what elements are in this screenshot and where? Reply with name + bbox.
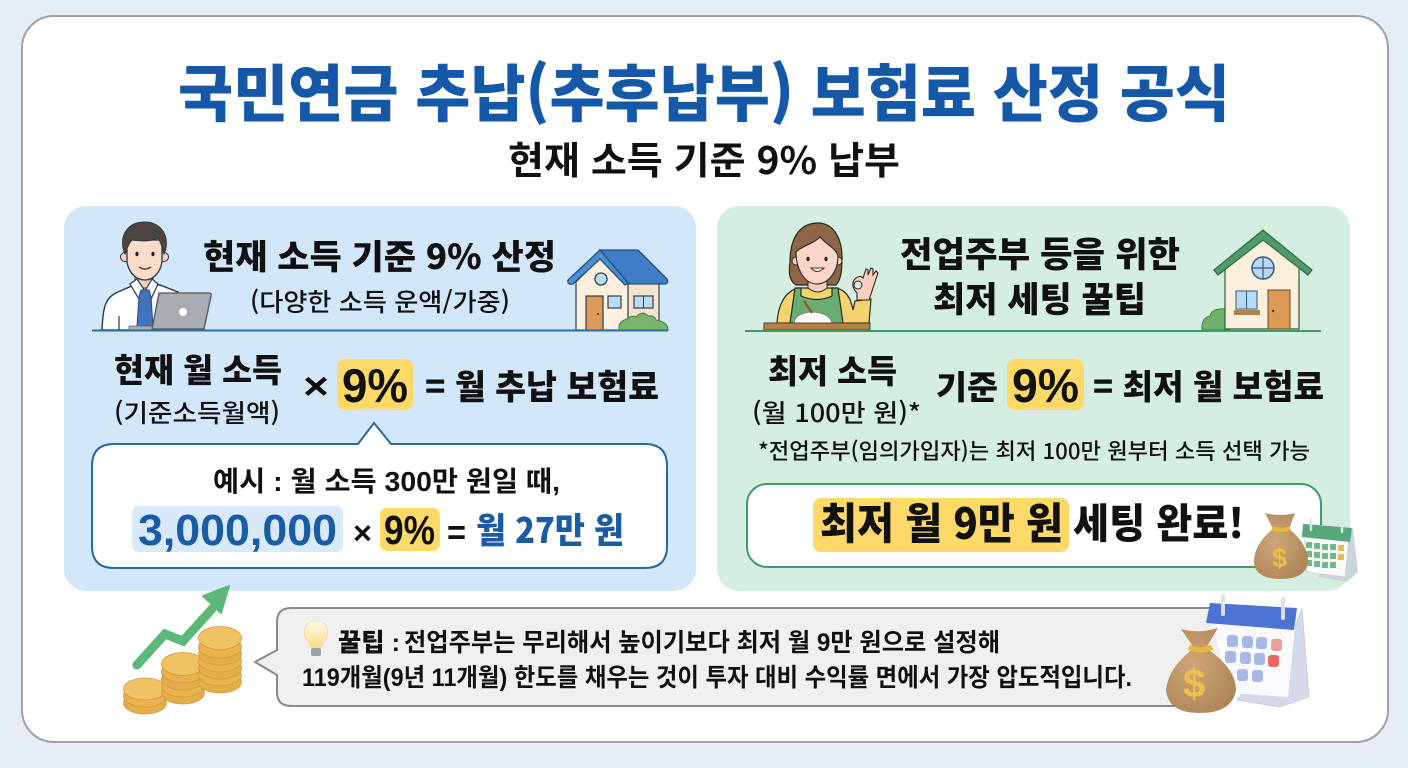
formula: lowest income [752,345,921,430]
formula: basis label: 기준 [936,361,998,409]
icon: money bag small: $ [1272,543,1287,573]
icon: money bag small [1254,513,1308,579]
tip line 2: 119개월(9년 11개월) 한도를 채우는 것이 투자 대비 수익률 면에서 가장 압도적입니다. [302,664,1132,692]
example rate: 9% [384,507,435,553]
subtitle: 현재 소득 기준 9% 납부 [508,130,900,185]
icon: light bulb [304,621,328,656]
coin stack tall [198,626,242,693]
divider line [92,330,668,332]
heading: homemaker: 최저 세팅 꿀팁 [933,272,1146,323]
example text: 예시 : 월 소득 300만 원일 때, [213,466,560,497]
title: 국민연금 추납(추후납부) 보험료 산정 공식 [178,44,1230,134]
divider line [745,330,1321,332]
example result: 월 27만 원 [476,503,624,554]
example amount: 3,000,000 [138,506,337,555]
formula: times symbol: × [303,366,329,408]
highlighted amount: 최저 월 9만 원 [820,490,1063,552]
arrow [137,586,229,665]
icon: man with laptop [102,222,211,330]
icon: coin stacks with arrow [124,586,242,714]
formula: highlighted rate: 9% [342,359,408,412]
formula: current monthly income [114,344,282,430]
formula: result: = 월 추납 보험료 [425,360,659,409]
formula: lowest income: (월 100만 원)* [752,394,921,430]
formula: result: = 최저 월 보험료 [1093,360,1324,409]
icon: large calendar [1206,596,1309,707]
formula: lowest income: 최저 소득 [768,345,897,393]
icon: large money bag: $ [1183,662,1205,706]
completion text: 세팅 완료! [1073,490,1244,550]
heading: homemaker [900,227,1180,323]
icon: woman with OK hand [764,223,878,330]
formula: current monthly income: (기준소득월액) [114,394,280,430]
example equals: = [447,514,466,552]
icon: calendar small [1302,520,1358,582]
tip bubble [255,608,1225,706]
formula: current monthly income: 현재 월 소득 [114,344,282,392]
tip line 1: 꿀팁 : [338,629,400,657]
icon: green-roof house [1202,230,1312,330]
example times: × [353,515,372,551]
panel: current income [64,206,696,591]
heading: homemaker: 전업주부 등을 위한 [900,227,1180,278]
coin stack middle [162,652,204,704]
formula: highlighted rate: 9% [1012,359,1079,412]
panel: homemaker minimum [717,206,1358,591]
coin stack short [124,678,166,714]
footnote: *전업주부(임의가입자)는 최저 100만 원부터 소득 선택 가능 [758,434,1310,466]
icon: large money bag [1166,628,1236,713]
result box [747,484,1321,567]
subheading: income: (다양한 소득 운액/가중) [250,283,510,319]
heading: current income: 현재 소득 기준 9% 산정 [203,230,556,279]
icon: blue-roof house [568,250,668,330]
tip line 1: 전업주부는 무리해서 높이기보다 최저 월 9만 원으로 설정해 [404,629,1000,657]
callout: example [92,423,667,568]
